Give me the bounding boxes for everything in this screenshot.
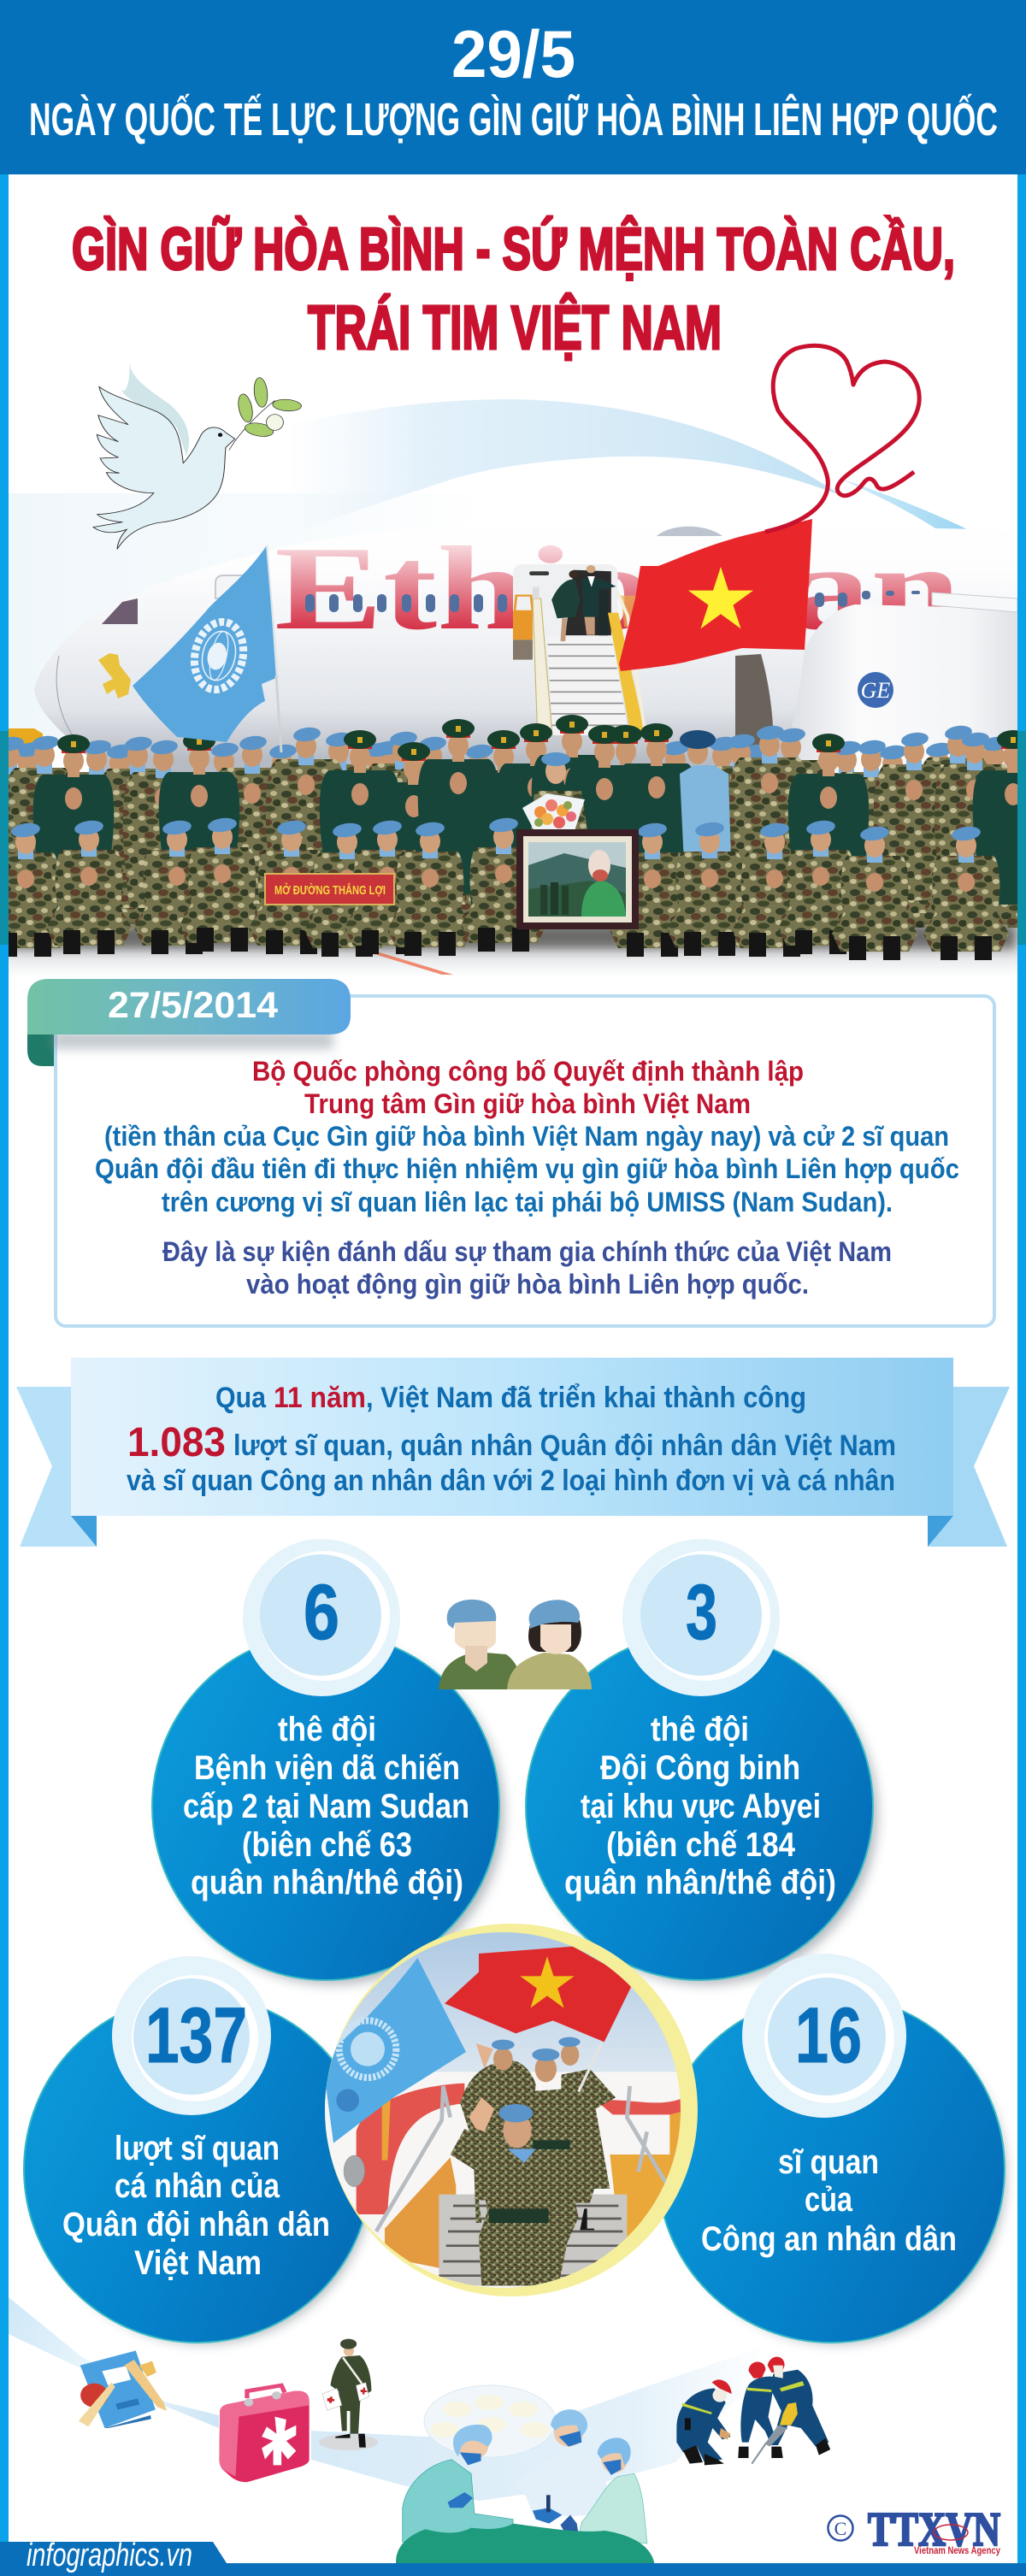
back row beret soldiers bbox=[0, 724, 1026, 913]
number: 6 bbox=[304, 1569, 339, 1656]
circle body bbox=[526, 1633, 873, 1980]
second firefighter bbox=[740, 2377, 778, 2445]
number halo bbox=[622, 1539, 780, 1696]
right surgeon head bbox=[601, 2446, 628, 2473]
blue description bbox=[95, 1121, 959, 1217]
operating lamp bbox=[424, 2385, 556, 2457]
indigo conclusion: Đây là sự kiện đánh dấu sự tham gia chính thức của Việt Nam bbox=[162, 1236, 892, 1267]
UN emblem bbox=[188, 617, 250, 694]
shadows at feet bbox=[10, 925, 1016, 949]
left surgeon gown bbox=[403, 2460, 513, 2542]
background band behind illustrations bbox=[9, 2297, 768, 2501]
dove rear wing bbox=[120, 362, 189, 456]
description: cấp 2 tại Nam Sudan bbox=[183, 1788, 469, 1825]
stat circle: 6 field hospital rotations bbox=[152, 1539, 504, 1984]
description: Bệnh viện dã chiến bbox=[194, 1749, 460, 1787]
photo: peacekeepers group bbox=[0, 715, 1026, 977]
icon: medic soldier bbox=[319, 2339, 378, 2450]
right surgeon gown bbox=[579, 2473, 647, 2544]
stat circle: 16 police officers bbox=[657, 1954, 1005, 2343]
aircraft fuselage bbox=[34, 523, 1017, 778]
main title: TRÁI TIM VIỆT NAM bbox=[308, 293, 722, 363]
blue description: (tiền thân của Cục Gìn giữ hòa bình Việt Nam ngày nay) và cử 2 sĩ quan bbox=[104, 1121, 949, 1152]
stat circle: 137 individual officers bbox=[24, 1956, 372, 2343]
number disc bbox=[640, 1554, 762, 1676]
glove with tool bbox=[533, 2508, 562, 2524]
circle body bbox=[657, 1995, 1005, 2343]
dove with olive branch bbox=[93, 362, 302, 549]
number disc bbox=[260, 1554, 381, 1676]
circle body bbox=[24, 1995, 371, 2343]
ribbon first line: Qua bbox=[215, 1382, 267, 1414]
date tab fold bbox=[27, 1035, 54, 1066]
ground bbox=[9, 928, 1017, 977]
olive branch bbox=[229, 377, 302, 451]
plane red livery bbox=[357, 2084, 464, 2214]
number halo bbox=[243, 1539, 400, 1696]
back row officers bbox=[33, 715, 1026, 917]
man beret bbox=[447, 1600, 496, 1629]
dove body bbox=[93, 386, 235, 549]
woman beret bbox=[529, 1600, 580, 1629]
UN flag bbox=[133, 545, 281, 752]
Ethiopian lettering: Ethiopian bbox=[274, 522, 961, 655]
third firefighter bbox=[771, 2370, 828, 2447]
slogan banner: MỞ ĐƯỜNG THẮNG LỢI bbox=[274, 882, 386, 898]
copyright mark bbox=[828, 2515, 853, 2541]
number ring bbox=[260, 1551, 390, 1681]
number: 3 bbox=[686, 1569, 717, 1656]
description: (biên chế 63 bbox=[242, 1826, 412, 1864]
soldier middle bbox=[525, 2048, 595, 2230]
aircraft window bbox=[344, 2155, 365, 2187]
number disc bbox=[133, 1978, 250, 2095]
date heading: 29/5 bbox=[451, 16, 575, 91]
engine pylon bbox=[932, 592, 1017, 612]
description: (biên chế 184 bbox=[606, 1826, 796, 1864]
number disc bbox=[768, 1978, 886, 2096]
red announcement: Bộ Quốc phòng công bố Quyết định thành lập bbox=[252, 1056, 804, 1087]
red announcement: Trung tâm Gìn giữ hòa bình Việt Nam bbox=[304, 1088, 751, 1119]
jet door and stairs bbox=[513, 564, 646, 735]
circle body bbox=[152, 1633, 499, 1980]
ribbon folds bbox=[71, 1516, 97, 1547]
right ribbon tail bbox=[928, 1387, 1010, 1547]
photo contents bbox=[325, 1932, 681, 2288]
icon: book, pencil and apple bbox=[79, 2350, 167, 2428]
agency name: Vietnam News Agency bbox=[914, 2544, 1000, 2556]
icon: pink medical kit bbox=[219, 2385, 310, 2482]
GE logo: GE bbox=[861, 678, 890, 703]
Vietnamese flag in photo bbox=[445, 1947, 634, 2042]
globe in logo bbox=[934, 2525, 968, 2540]
ribbon third line: và sĩ quan Công an nhân dân với 2 loại hình đơn vị và cá nhân bbox=[127, 1465, 895, 1497]
crouching firefighter bbox=[676, 2388, 730, 2462]
description bbox=[564, 1711, 836, 1901]
circle shadow bbox=[37, 2008, 372, 2343]
description: quân nhân/thê đội) bbox=[564, 1864, 836, 1901]
runway marking bbox=[344, 945, 453, 975]
panel frame bbox=[56, 996, 994, 1326]
UN flag in photo bbox=[322, 1958, 466, 2143]
description bbox=[701, 2143, 957, 2258]
left surgeon glove bbox=[448, 2492, 473, 2508]
circle shadow bbox=[162, 1642, 504, 1984]
woman uniform bbox=[507, 1653, 592, 1689]
number ring bbox=[132, 1975, 258, 2101]
number halo bbox=[112, 1956, 271, 2115]
middle surgeon head bbox=[554, 2418, 583, 2447]
soldier front bbox=[451, 2097, 579, 2285]
flight attendant right bbox=[581, 579, 616, 617]
woman with flowers bbox=[522, 752, 590, 846]
indigo conclusion: vào hoạt động gìn giữ hòa bình Liên hợp quốc. bbox=[246, 1269, 809, 1300]
description: thê đội bbox=[278, 1711, 376, 1748]
description: quân nhân/thê đội) bbox=[191, 1864, 463, 1901]
ribbon first line bbox=[215, 1382, 806, 1414]
footer tab bbox=[0, 2542, 227, 2576]
ribbon banner: 1.083 personnel bbox=[16, 1358, 1010, 1547]
ribbon first line: , Việt Nam đã triển khai thành công bbox=[366, 1382, 806, 1414]
cap edge of border over photo bbox=[0, 731, 9, 945]
number ring bbox=[764, 1973, 894, 2103]
date tab shadow bbox=[51, 1030, 333, 1049]
front row kneeling soldiers bbox=[0, 816, 1009, 960]
1.083 figure: 1.083 bbox=[127, 1420, 226, 1465]
date tab bbox=[27, 979, 351, 1035]
center photo: peacekeepers descending stairs bbox=[325, 1924, 698, 2296]
crowd backdrop bbox=[9, 774, 1017, 928]
footer bar bbox=[0, 2538, 1026, 2576]
engine gap bbox=[735, 654, 774, 752]
number: 137 bbox=[145, 1992, 247, 2079]
stair side panels bbox=[385, 2157, 456, 2272]
yellow ring bbox=[325, 1924, 698, 2296]
description: Việt Nam bbox=[134, 2244, 262, 2282]
flight attendant left bbox=[551, 580, 580, 618]
panel: 27/5/2014 milestone bbox=[27, 979, 994, 1326]
description: Công an nhân dân bbox=[701, 2220, 957, 2258]
stair steps bbox=[439, 2195, 627, 2285]
air force officer bbox=[680, 730, 731, 864]
ribbon first line: 11 năm bbox=[274, 1382, 366, 1414]
copyright mark: C bbox=[834, 2518, 846, 2539]
main title bbox=[72, 215, 955, 363]
icon: firefighters rescue bbox=[676, 2357, 830, 2465]
engine nacelle bbox=[775, 604, 1017, 782]
lion emblem bbox=[98, 653, 131, 699]
stair rails bbox=[376, 2086, 671, 2231]
left surgeon head bbox=[457, 2431, 488, 2460]
slogan banner bbox=[265, 874, 394, 905]
illustration: surgical team bbox=[396, 2385, 654, 2563]
description bbox=[183, 1711, 469, 1901]
number ring bbox=[640, 1551, 770, 1681]
description: lượt sĩ quan bbox=[115, 2130, 280, 2167]
surgical drape left bbox=[396, 2524, 513, 2563]
soldier behind right bbox=[558, 2037, 616, 2189]
blue description: Quân đội đầu tiên đi thực hiện nhiệm vụ gìn giữ hòa bình Liên hợp quốc bbox=[95, 1153, 959, 1184]
woman face bbox=[540, 1624, 571, 1654]
ribbon body bbox=[71, 1358, 953, 1516]
description: sĩ quan bbox=[778, 2143, 879, 2181]
antenna dome bbox=[657, 527, 722, 536]
number: 16 bbox=[795, 1992, 862, 2079]
GE logo bbox=[858, 672, 893, 708]
date text: 27/5/2014 bbox=[108, 985, 278, 1026]
header band bbox=[0, 0, 1026, 174]
front door bbox=[215, 575, 248, 598]
rear fill-in soldiers bbox=[0, 740, 979, 912]
middle surgeon gown bbox=[513, 2449, 608, 2516]
description: Đội Công binh bbox=[600, 1749, 800, 1787]
logo: TTXVN Vietnam News Agency bbox=[828, 2503, 1000, 2556]
background swoosh ribbon bbox=[9, 399, 1017, 741]
stat circle: 3 engineering rotations bbox=[526, 1539, 877, 1984]
website: infographics.vn bbox=[27, 2538, 192, 2573]
circle shadow bbox=[535, 1642, 877, 1984]
woman hair bbox=[528, 1620, 581, 1652]
heart ribbon bbox=[765, 345, 919, 532]
soldier behind left bbox=[460, 2040, 536, 2223]
blue description: trên cương vị sĩ quan liên lạc tại phái bộ UMISS (Nam Sudan). bbox=[162, 1187, 893, 1217]
man face bbox=[455, 1616, 496, 1651]
icon: peacekeeper man and woman bbox=[439, 1600, 592, 1689]
framed portrait bbox=[516, 829, 639, 929]
number halo bbox=[742, 1954, 906, 2118]
red announcement bbox=[252, 1056, 804, 1119]
Vietnamese flag bbox=[619, 519, 812, 671]
circle shadow bbox=[670, 2008, 1005, 2343]
description: tại khu vực Abyei bbox=[581, 1788, 821, 1825]
photo: aircraft with Ethiopian livery bbox=[34, 522, 1017, 782]
cockpit window bbox=[102, 598, 138, 624]
description: Quân đội nhân dân bbox=[62, 2206, 330, 2243]
surgical drape right bbox=[513, 2524, 654, 2563]
man uniform bbox=[439, 1652, 520, 1689]
dove eye bbox=[218, 433, 222, 437]
description: của bbox=[805, 2181, 853, 2219]
radome seam bbox=[56, 656, 73, 735]
description bbox=[62, 2130, 330, 2282]
left ribbon tail bbox=[16, 1387, 97, 1547]
description: cá nhân của bbox=[115, 2167, 280, 2205]
jackhammer bbox=[780, 2402, 798, 2426]
indigo conclusion bbox=[162, 1236, 892, 1300]
tug vehicle bbox=[9, 728, 43, 752]
description: thê đội bbox=[651, 1711, 749, 1748]
flag star bbox=[688, 567, 753, 628]
cabin windows bbox=[305, 591, 920, 612]
ribbon second line: lượt sĩ quan, quân nhân Quân đội nhân dân Việt Nam bbox=[233, 1429, 896, 1462]
